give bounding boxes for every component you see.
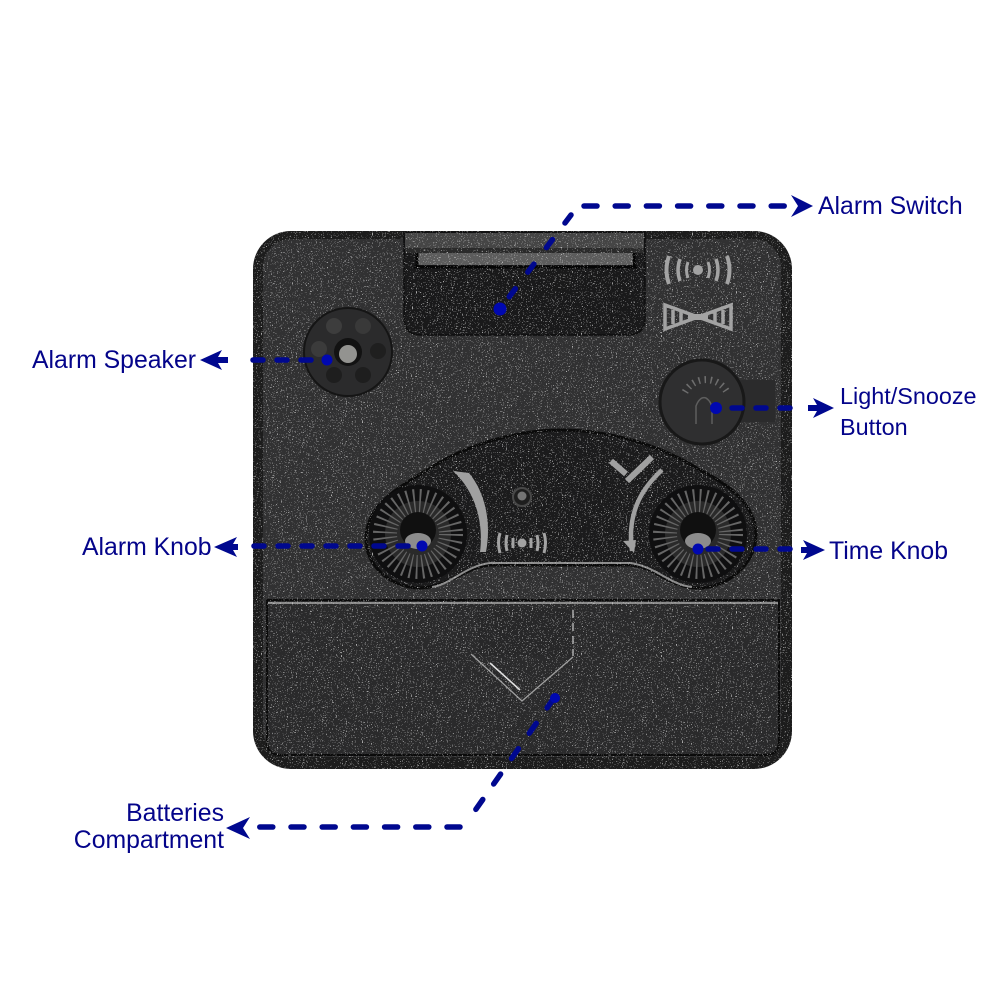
callout: alarm speaker: Alarm Speaker bbox=[32, 347, 196, 374]
callout: batteries compartment: Batteries bbox=[126, 800, 224, 827]
surface speckle bbox=[253, 231, 792, 769]
icon: alarm on bbox=[666, 256, 730, 284]
icon: alarm symbol on panel bbox=[498, 533, 546, 553]
alarm speaker bbox=[304, 308, 392, 396]
icon: alarm off bbox=[665, 305, 731, 329]
callout: light snooze button: Light/Snooze bbox=[840, 383, 977, 409]
knob recess panel bbox=[366, 430, 756, 588]
panel indicator bbox=[513, 488, 531, 506]
alarm knob direction arc bbox=[453, 471, 488, 552]
light snooze button bbox=[660, 360, 775, 444]
callout: light snooze button: Button bbox=[840, 414, 908, 440]
callout: time knob: Time Knob bbox=[829, 538, 948, 565]
battery compartment cover bbox=[267, 600, 779, 755]
alarm switch recess bbox=[404, 232, 645, 335]
battery cover arrow mark bbox=[471, 610, 573, 701]
time knob direction arc with check mark bbox=[611, 457, 662, 553]
alarm knob bbox=[369, 485, 467, 583]
callout: alarm switch: Alarm Switch bbox=[818, 193, 963, 220]
callout: alarm knob bbox=[82, 534, 428, 561]
time knob bbox=[649, 485, 747, 583]
callout: alarm switch bbox=[494, 193, 963, 316]
device body bbox=[253, 231, 792, 769]
callout: alarm knob: Alarm Knob bbox=[82, 534, 212, 561]
callout: light snooze button bbox=[710, 383, 977, 440]
face plate bbox=[263, 239, 781, 757]
callout: alarm speaker bbox=[32, 347, 332, 374]
body shell bbox=[253, 231, 792, 769]
callout: time knob bbox=[692, 538, 948, 565]
callout: batteries compartment bbox=[74, 693, 560, 854]
callout: batteries compartment: Compartment bbox=[74, 827, 224, 854]
